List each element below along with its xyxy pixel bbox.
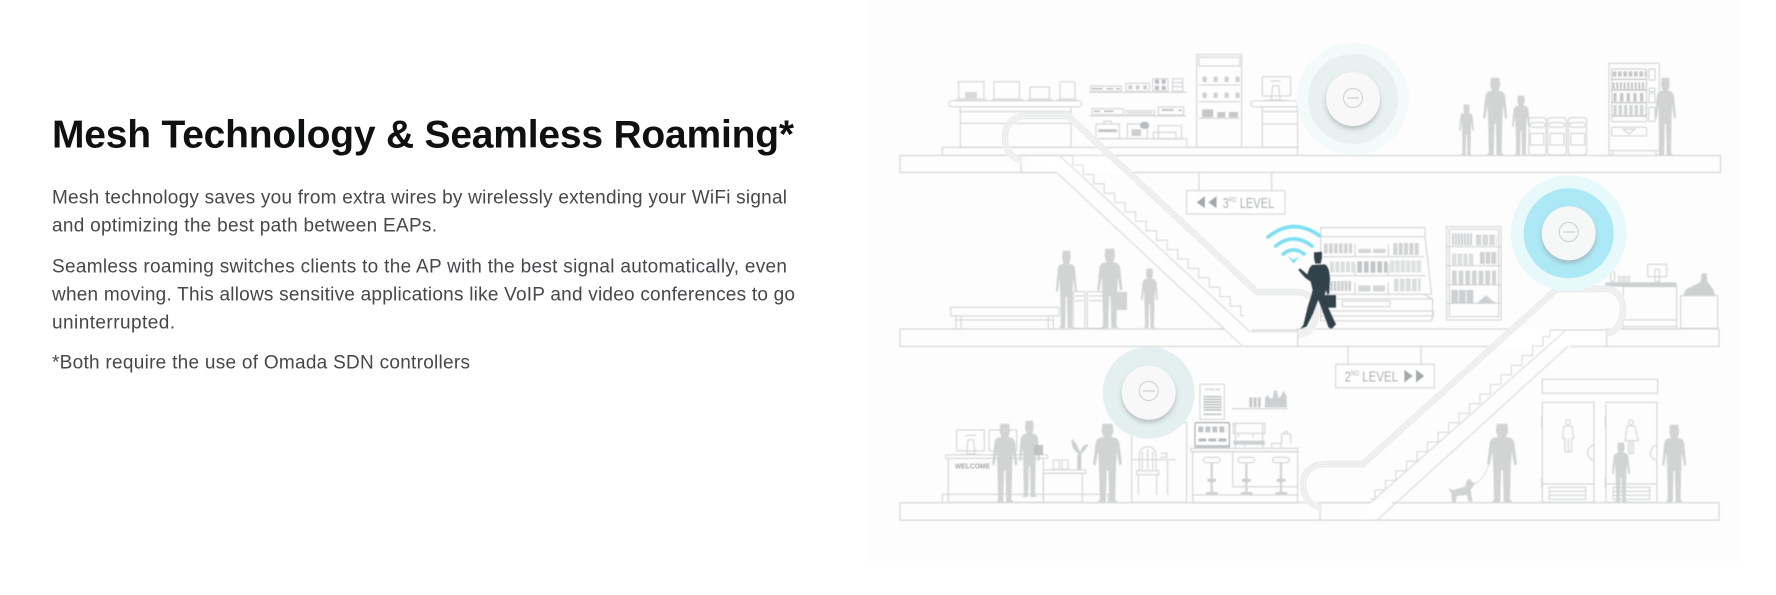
text block: seamless roaming bbox=[51, 256, 795, 334]
icon: women's room bbox=[1625, 420, 1638, 453]
shelves: audio and network gear bbox=[1089, 79, 1187, 147]
level sign: 3rd level: RD bbox=[1229, 195, 1237, 204]
text block: seamless roaming: when moving. This allows sensitive applications like VoIP and video conferences to go bbox=[51, 284, 795, 306]
level sign: 3rd level bbox=[1187, 173, 1285, 214]
access point: top floor bbox=[1297, 43, 1409, 155]
level sign: 3rd level: LEVEL bbox=[1237, 195, 1274, 212]
top floor: vending machine bbox=[1609, 63, 1659, 155]
lower floor: coffee bar: Drink list bbox=[1205, 387, 1221, 392]
title: Mesh Technology & Seamless Roaming* bbox=[52, 114, 795, 156]
people: middle floor bbox=[1056, 249, 1158, 328]
people: top floor bbox=[1459, 78, 1676, 155]
text block: footnote: *Both require the use of Omada SDN controllers bbox=[52, 352, 470, 374]
text block: seamless roaming: Seamless roaming switches clients to the AP with the best signal automatically, even bbox=[52, 256, 787, 278]
icon: men's room bbox=[1563, 420, 1574, 452]
lower escalator bbox=[1303, 289, 1623, 520]
level sign: 2nd level bbox=[1336, 346, 1434, 388]
text block: seamless roaming: uninterrupted. bbox=[52, 312, 175, 334]
middle floor: refrigerated display case bbox=[1321, 228, 1433, 321]
upper escalator bbox=[1005, 116, 1316, 346]
access point: lower floor bbox=[1103, 347, 1195, 439]
middle floor: bench and bins bbox=[951, 292, 1104, 329]
level sign: 2nd level: 2 bbox=[1345, 369, 1353, 386]
mall illustration bbox=[900, 55, 1720, 520]
level sign: 3rd level: 3 bbox=[1223, 195, 1231, 212]
tall display cabinet bbox=[1197, 55, 1242, 147]
dog on a leash bbox=[1448, 466, 1488, 502]
illustration backdrop bbox=[866, 0, 1738, 566]
lower floor: coffee bar bbox=[1191, 384, 1298, 503]
reception sign: WELCOME bbox=[955, 463, 990, 470]
lower floor: cafe table and chair bbox=[1132, 422, 1187, 502]
middle floor: counter and produce bbox=[1605, 264, 1718, 329]
text block: mesh technology: and optimizing the best path between EAPs. bbox=[52, 216, 437, 236]
lower floor: reception desk bbox=[942, 430, 1108, 502]
small counter and monitor bbox=[1251, 77, 1298, 147]
text block: mesh technology: Mesh technology saves you from extra wires by wirelessly extending your WiFi signal bbox=[52, 188, 787, 208]
walking man with phone bbox=[1298, 252, 1336, 329]
people: lower floor bbox=[992, 421, 1686, 502]
access point: middle floor, active bbox=[1511, 175, 1627, 291]
text block: mesh technology bbox=[52, 188, 787, 236]
level sign: 2nd level: LEVEL bbox=[1359, 369, 1398, 386]
floor slabs bbox=[900, 154, 1720, 520]
icon: wifi signal bbox=[1268, 227, 1319, 264]
bar stools bbox=[1203, 457, 1289, 494]
restroom doors bbox=[1542, 379, 1658, 502]
middle floor: tall grocery shelf bbox=[1447, 227, 1501, 320]
level sign: 2nd level: ND bbox=[1351, 369, 1359, 378]
top floor: electronics counter bbox=[942, 55, 1298, 155]
top floor: trash bins bbox=[1529, 118, 1587, 155]
